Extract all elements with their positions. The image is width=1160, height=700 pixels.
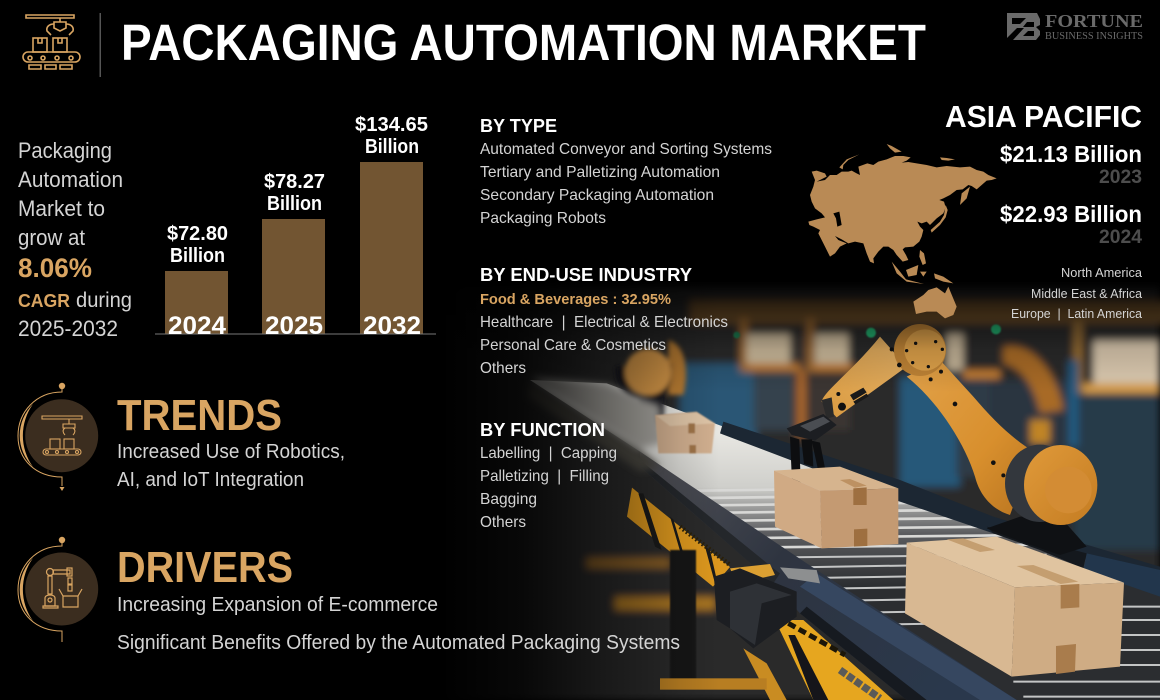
map: Asia Pacific (808, 144, 997, 318)
segment: by function (480, 420, 617, 531)
bar chart: $134.65 (355, 114, 428, 136)
yellow frame upper (627, 488, 730, 587)
regional heading and values: Middle East & Africa (1031, 286, 1143, 301)
segment: by function: BY FUNCTION (480, 420, 605, 440)
market growth statement: grow at (18, 225, 85, 250)
blurred factory background (440, 287, 1160, 700)
drivers text: Increasing Expansion of E-commerce (117, 594, 438, 616)
segment: by function: Others (480, 514, 526, 531)
trends text: Increased Use of Robotics, (117, 441, 345, 463)
near rail (640, 452, 1017, 700)
conveyor leg (670, 550, 696, 683)
market growth statement: Automation (18, 167, 123, 192)
bar chart: $78.27 (264, 171, 325, 193)
robot base joint (1005, 445, 1075, 522)
gripper (787, 414, 837, 441)
elbow joint (894, 324, 946, 376)
far box (655, 412, 715, 453)
regional heading and values: 2024 (1099, 227, 1142, 248)
bar chart: Billion (170, 245, 225, 267)
segment: by end-use industry (480, 265, 728, 377)
segment: by function: Palletizing | Filling (480, 468, 609, 485)
black sensor box (714, 568, 797, 648)
icon: trends badge (18, 383, 98, 491)
far rail (720, 422, 1160, 577)
trends text (117, 391, 345, 491)
blurred far conveyor (527, 377, 663, 472)
upper arm (907, 360, 1033, 515)
segment: by type: BY TYPE (480, 116, 557, 136)
rollers (693, 488, 1033, 547)
conveyor surface (530, 380, 1160, 700)
market growth statement: CAGR (18, 291, 70, 311)
yellow frame lower (775, 620, 893, 700)
segment: by end-use industry: Healthcare | Electrical & Electronics (480, 314, 728, 331)
segment: by type: Tertiary and Palletizing Automation (480, 164, 720, 181)
trends text: AI, and IoT Integration (117, 469, 304, 491)
icon: drivers badge (18, 537, 98, 642)
segment: by function: Labelling | Capping (480, 445, 617, 462)
market growth statement (18, 138, 132, 341)
segment: by type: Packaging Robots (480, 210, 606, 227)
header divider (100, 13, 101, 77)
trends text: TRENDS (117, 391, 282, 440)
drivers text (117, 543, 680, 654)
regional heading and values: Europe | Latin America (1011, 306, 1143, 321)
segment: by type: Secondary Packaging Automation (480, 187, 714, 204)
logo: Fortune Business Insights: BUSINESS INSIGHTS (1045, 31, 1143, 42)
middle box (774, 467, 898, 548)
regional heading and values: North America (1061, 265, 1143, 280)
segment: by end-use industry: Personal Care & Cosmetics (480, 337, 666, 354)
header icon: conveyor with robot gripper (23, 15, 80, 69)
market growth statement: 8.06% (18, 253, 92, 283)
regional heading and values (945, 99, 1143, 321)
green lights (733, 324, 1001, 338)
logo: Fortune Business Insights (1007, 11, 1143, 42)
segment: by type (480, 116, 772, 227)
drivers text: DRIVERS (117, 543, 293, 592)
segment: by type: Automated Conveyor and Sorting Systems (480, 141, 772, 158)
regional heading and values: 2023 (1099, 167, 1142, 188)
forearm (822, 337, 907, 417)
regional heading and values: $22.93 Billion (1000, 201, 1142, 227)
regional heading and values: ASIA PACIFIC (945, 99, 1142, 134)
logo: Fortune Business Insights: FORTUNE (1045, 11, 1143, 31)
title: PACKAGING AUTOMATION MARKET (121, 14, 926, 71)
market growth statement: Packaging (18, 138, 112, 163)
segment: by end-use industry: BY END-USE INDUSTRY (480, 265, 692, 285)
bar chart: $72.80 (167, 223, 228, 245)
bar chart: 2025 (265, 312, 323, 340)
bar chart (155, 114, 436, 340)
bar chart: 2024 (168, 312, 226, 340)
bar chart: Billion (267, 193, 322, 215)
segment: by end-use industry: Others (480, 360, 526, 377)
market growth statement: during (76, 289, 132, 312)
segment: by end-use industry: Food & Beverages : 32.95% (480, 291, 671, 308)
robot stand (987, 517, 1087, 555)
segment: by function: Bagging (480, 491, 537, 508)
market growth statement: Market to (18, 196, 105, 221)
bar chart: 2032 (363, 312, 421, 340)
drivers text: Significant Benefits Offered by the Automated Packaging Systems (117, 632, 680, 654)
front box (905, 537, 1124, 677)
bar chart: Billion (365, 136, 419, 158)
regional heading and values: $21.13 Billion (1000, 141, 1142, 167)
market growth statement: 2025-2032 (18, 316, 118, 341)
blurred second robot (615, 340, 686, 426)
